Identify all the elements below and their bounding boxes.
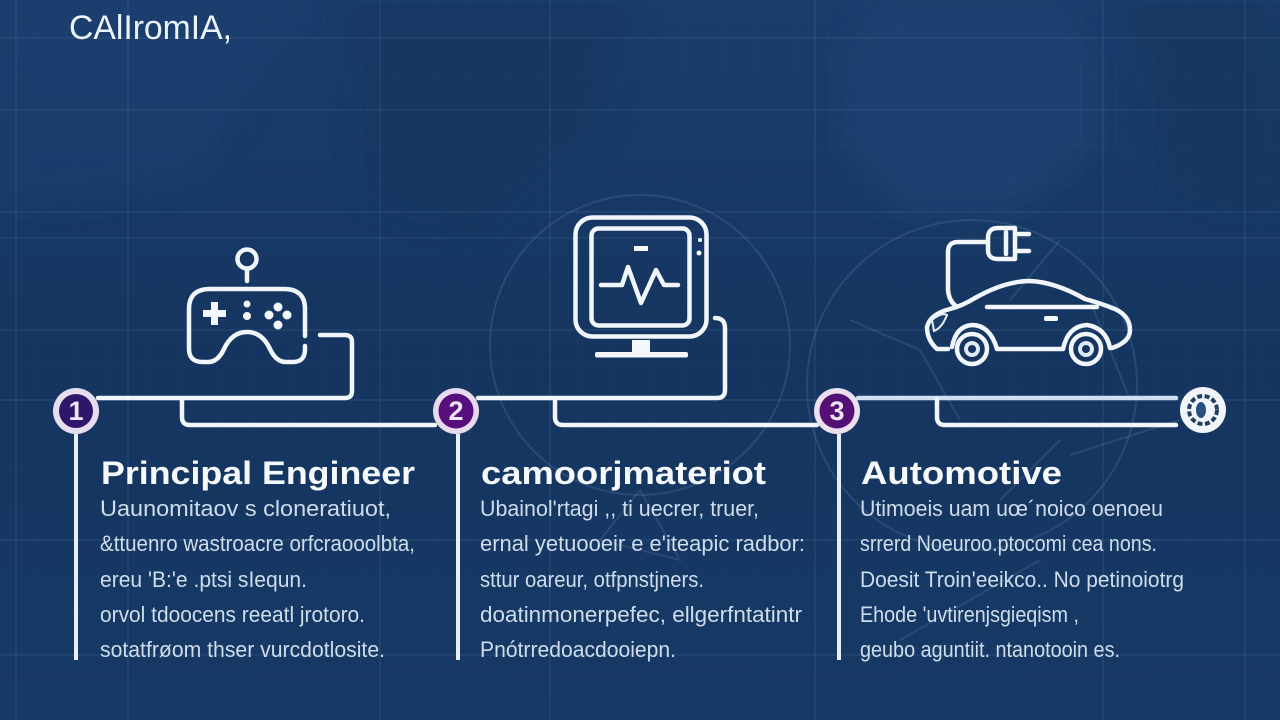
text block: Principal Engineer: orvol tdoocens reeatl jrotoro.	[100, 602, 365, 627]
connector: step 2 to 3	[478, 318, 817, 425]
column rule 3	[837, 434, 841, 660]
text block: Automotive: geubo aguntiit. ntanotooin es.	[860, 637, 1120, 662]
text block: Principal Engineer: ereu 'B:'e .ptsi sIequn.	[100, 567, 307, 592]
text block: Automotive: Ehode 'uvtirenjsgieqism ,	[860, 602, 1079, 627]
text block: Automotive: Automotive	[861, 455, 1062, 491]
text block: camoorjmateriot	[480, 455, 805, 662]
text block: Principal Engineer: sotatfrøom thser vurcdotlosite.	[100, 637, 385, 662]
connector: step 1 to 2	[98, 335, 435, 425]
connector: step 3 to end	[858, 398, 1176, 425]
text block: Automotive: Doesit Troin'eeikco.. No petinoiotrg	[860, 567, 1184, 592]
text block: Principal Engineer: Principal Engineer	[101, 455, 415, 491]
icon: monitor with pulse	[576, 218, 706, 358]
step 1 marker	[53, 388, 99, 434]
text block: camoorjmateriot: sttur oareur, otfpnstjners.	[480, 567, 704, 592]
end marker: gear	[1180, 387, 1226, 433]
step 2 marker: 2	[448, 396, 464, 426]
step 2 marker	[433, 388, 479, 434]
column rule 2	[456, 434, 460, 660]
text block: Principal Engineer	[100, 455, 415, 662]
step 3 marker	[814, 388, 860, 434]
text block: Automotive: Utimoeis uam uœ´noico oenoeu	[860, 496, 1163, 521]
title: CAlIromIA,	[69, 9, 232, 47]
text block: camoorjmateriot: camoorjmateriot	[481, 455, 766, 491]
step 1 marker: 1	[68, 396, 84, 426]
text block: Automotive	[860, 455, 1184, 662]
text block: camoorjmateriot: Ubainol'rtagi ,, ti uecrer, truer,	[480, 496, 759, 521]
text block: Automotive: srrerd Noeuroo.ptocomi cea nons.	[860, 531, 1157, 556]
text block: Principal Engineer: Uaunomitaov s cloneratiuot,	[100, 496, 391, 521]
text block: camoorjmateriot: Pnótrredoacdooiepn.	[480, 637, 676, 662]
text block: camoorjmateriot: doatinmonerpefec, ellgerfntatintr	[480, 602, 802, 627]
text block: camoorjmateriot: ernal yetuooeir e e'iteapic radbor:	[480, 531, 805, 556]
text block: Principal Engineer: &ttuenro wastroacre orfcraooolbta,	[100, 531, 415, 556]
step 3 marker: 3	[829, 396, 845, 426]
icon: game controller	[189, 250, 305, 362]
column rule 1	[74, 434, 78, 660]
icon: electric car with plug	[927, 228, 1130, 364]
